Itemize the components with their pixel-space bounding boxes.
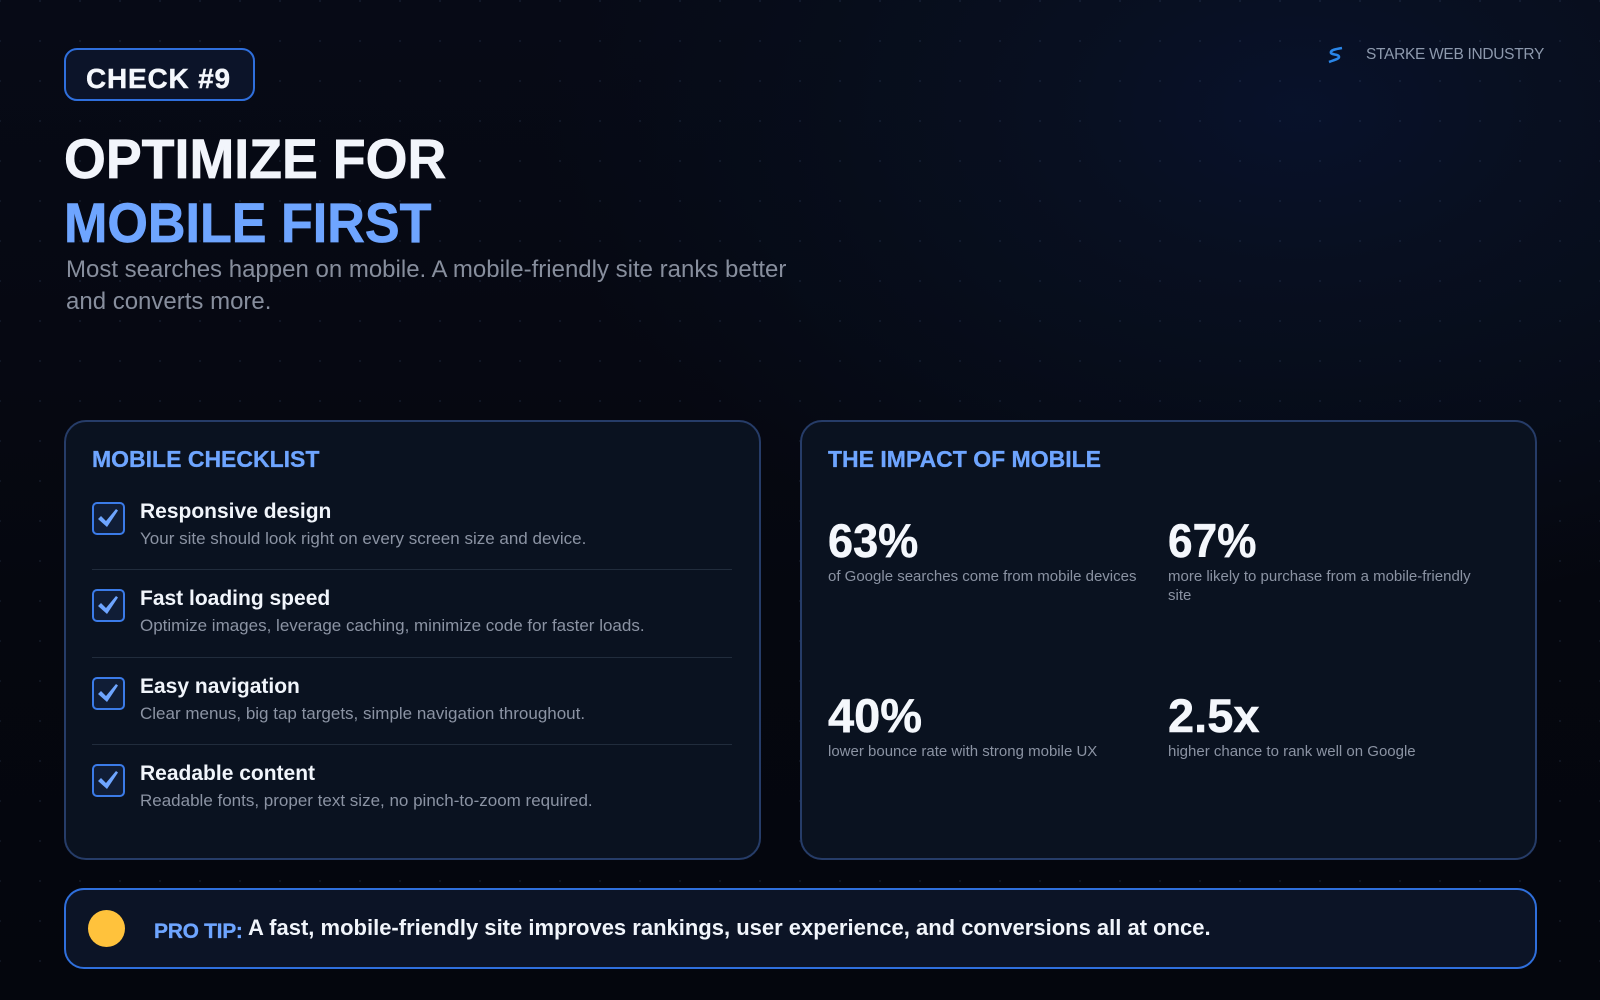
item: readable content: Readable fonts, proper text size, no pinch-to-zoom required. [140, 791, 593, 810]
stat: 2.5x [1168, 689, 1416, 760]
stat: 67% [1168, 514, 1471, 604]
stat: 67%: 67% [1168, 514, 1256, 567]
pro tip label: PRO TIP: [154, 920, 243, 943]
subtitle [66, 256, 786, 315]
badge: check number [64, 48, 255, 101]
brand name: STARKE WEB INDUSTRY [1366, 46, 1544, 63]
panel: mobile checklist [64, 420, 761, 860]
item: responsive design [92, 500, 586, 548]
brand logo and name [1328, 46, 1544, 64]
item: responsive design: Your site should look right on every screen size and device. [140, 529, 586, 548]
panel: impact of mobile [800, 420, 1537, 860]
checklist heading: MOBILE CHECKLIST [92, 446, 319, 472]
icon: yellow circle [88, 910, 125, 947]
icon: brand S [1328, 46, 1342, 64]
title: OPTIMIZE FOR [64, 127, 446, 190]
stat: 40%: lower bounce rate with strong mobile UX [828, 743, 1097, 760]
stat: 63%: of Google searches come from mobile devices [828, 568, 1136, 585]
panel: pro tip [64, 888, 1537, 969]
item: fast loading speed: Optimize images, leverage caching, minimize code for faster loads. [140, 616, 645, 635]
item: easy navigation [92, 675, 585, 723]
stat: 67%: more likely to purchase from a mobile-friendly [1168, 568, 1471, 585]
title [64, 127, 446, 254]
stat: 63%: 63% [828, 514, 918, 567]
stat: 40% [828, 689, 1097, 760]
stat: 67%: site [1168, 587, 1191, 604]
subtitle: Most searches happen on mobile. A mobile-friendly site ranks better [66, 256, 786, 283]
item: easy navigation: Clear menus, big tap targets, simple navigation throughout. [140, 704, 585, 723]
stat: 40%: 40% [828, 689, 922, 742]
item: easy navigation: Easy navigation [140, 675, 300, 698]
impact heading: THE IMPACT OF MOBILE [828, 446, 1101, 472]
item: fast loading speed: Fast loading speed [140, 587, 330, 610]
item: readable content: Readable content [140, 762, 315, 785]
item: readable content [92, 762, 593, 810]
stat: 63% [828, 514, 1136, 585]
item: fast loading speed [92, 587, 645, 635]
pro tip text: A fast, mobile-friendly site improves rankings, user experience, and conversions all at once. [248, 915, 1211, 940]
stat: 2.5x: 2.5x [1168, 689, 1259, 742]
item: responsive design: Responsive design [140, 500, 331, 523]
stat: 2.5x: higher chance to rank well on Google [1168, 743, 1416, 760]
badge: check number: CHECK #9 [86, 63, 231, 94]
subtitle: and converts more. [66, 288, 271, 315]
title: MOBILE FIRST [64, 191, 431, 254]
